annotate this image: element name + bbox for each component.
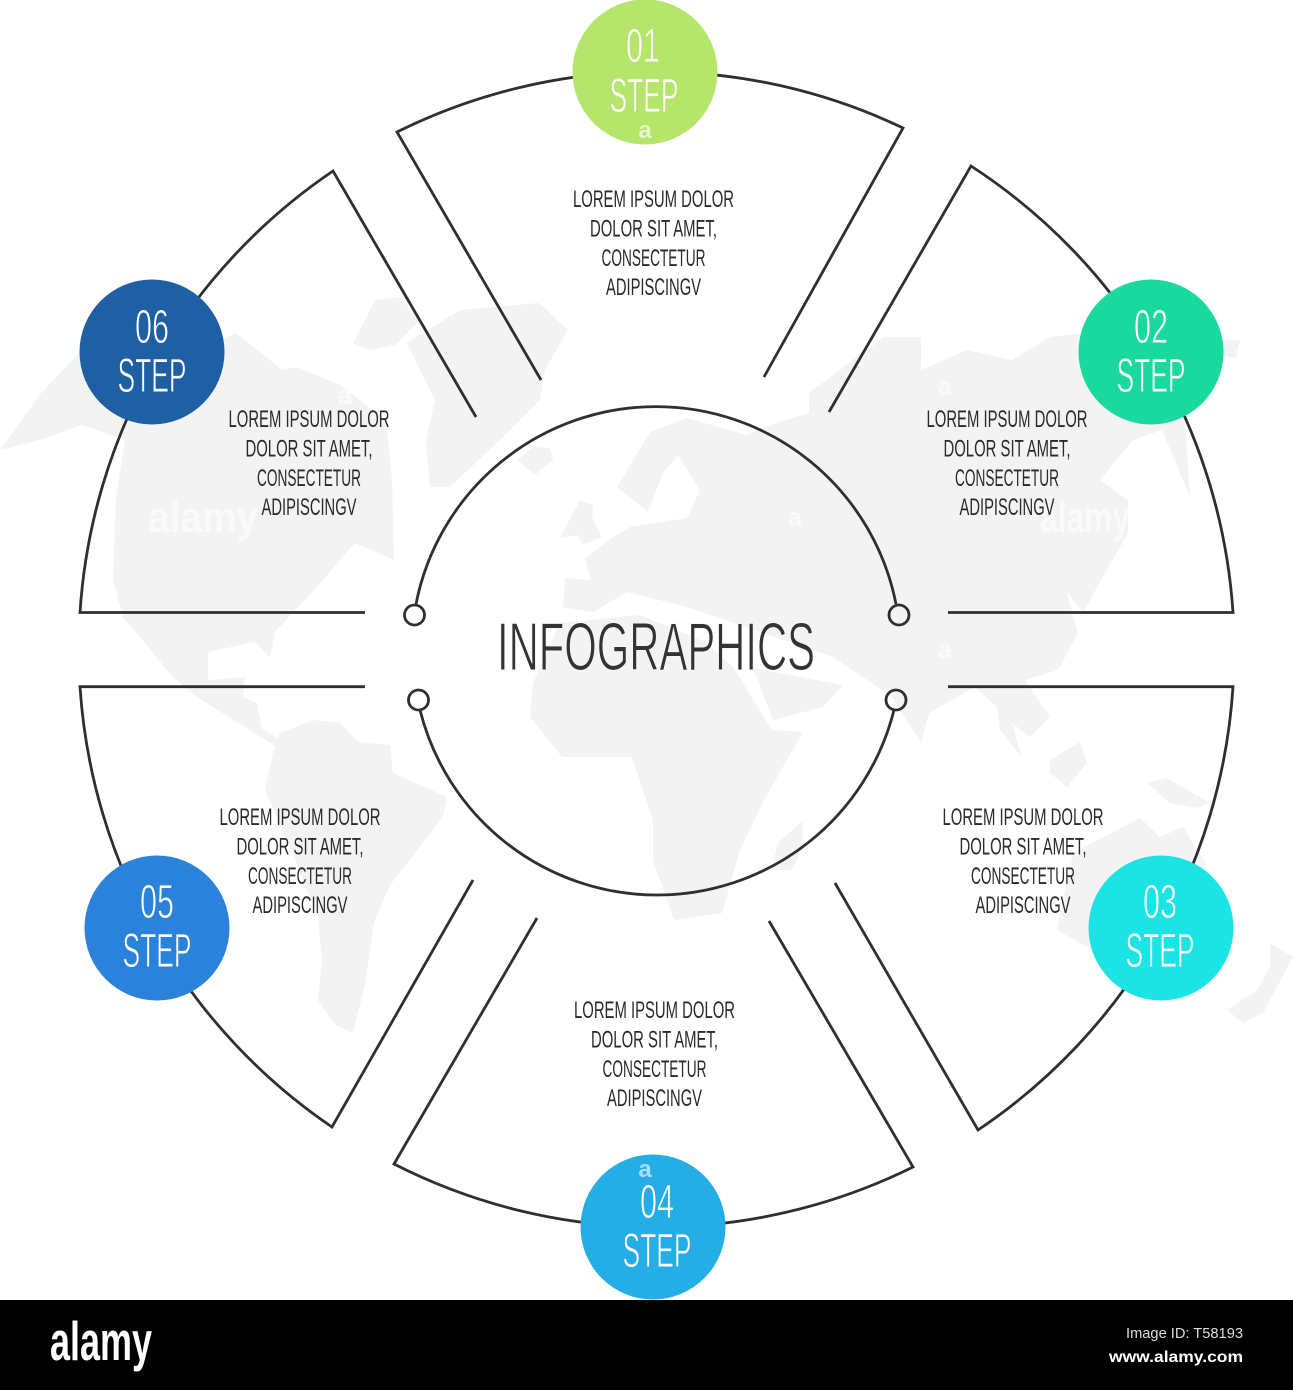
- text block: step 2: [926, 406, 1088, 521]
- badge: step 06: [80, 280, 224, 424]
- badge: step 01: 01: [626, 20, 660, 73]
- text block: step 4: LOREM IPSUM DOLOR: [574, 997, 735, 1024]
- watermark: left: alamy: [148, 493, 258, 542]
- footer bar: [0, 1300, 1293, 1390]
- text block: step 2: DOLOR SIT AMET,: [944, 436, 1070, 462]
- badge: step 01: [572, 0, 718, 144]
- map: australia: [1057, 818, 1210, 990]
- map: africa: [530, 615, 803, 920]
- text block: step 1: DOLOR SIT AMET,: [590, 216, 717, 242]
- panel: step 1 outline: [397, 72, 903, 380]
- text block: step 6: [228, 406, 390, 521]
- text block: step 3: LOREM IPSUM DOLOR: [942, 804, 1104, 831]
- text block: step 6: ADIPISCINGV: [262, 494, 356, 521]
- text block: step 1: CONSECTETUR: [602, 245, 706, 272]
- badge: step 04: STEP: [622, 1225, 692, 1278]
- map: greenland: [407, 303, 568, 487]
- panel: step 5 outline: [80, 687, 473, 1127]
- badge: step 06: 06: [135, 301, 169, 354]
- text block: step 6: CONSECTETUR: [257, 465, 361, 492]
- text block: step 1: ADIPISCINGV: [606, 274, 701, 301]
- text block: step 4: [574, 997, 735, 1112]
- badge: step 02: STEP: [1116, 350, 1186, 403]
- map: japan: [1050, 742, 1087, 787]
- panel: step 6 outline: [80, 171, 476, 612]
- map: madagascar: [771, 820, 803, 870]
- badge: step 05: STEP: [122, 925, 192, 978]
- map: arctic island: [353, 297, 420, 350]
- badge: step 04: [580, 1154, 726, 1300]
- text block: step 2: ADIPISCINGV: [960, 494, 1054, 521]
- text block: step 3: ADIPISCINGV: [976, 892, 1070, 919]
- text block: step 4: ADIPISCINGV: [607, 1085, 702, 1112]
- badge: step 03: 03: [1143, 876, 1177, 929]
- map: north america: [0, 333, 394, 747]
- badge: step 05: [84, 856, 230, 1000]
- badge: step 04: 04: [640, 1176, 674, 1229]
- map: british isles: [560, 500, 602, 545]
- map: arabia: [753, 668, 843, 720]
- badge: step 02: [1078, 280, 1224, 424]
- panel: step 4 outline: [394, 918, 913, 1227]
- watermark: glyph upper right: a: [938, 371, 953, 401]
- watermark: glyph right: a: [938, 634, 953, 664]
- map: south america: [265, 720, 447, 1033]
- watermark: right: alamy: [1040, 493, 1130, 542]
- badge: step 05: 05: [140, 876, 174, 929]
- footer image id: Image ID: T58193: [1126, 1325, 1243, 1342]
- text block: step 3: [942, 804, 1104, 919]
- watermark: glyph centre: a: [788, 502, 803, 532]
- map: indonesia: [1147, 778, 1210, 808]
- map: iceland: [517, 447, 553, 475]
- badge: step 06: STEP: [118, 350, 186, 403]
- text block: step 5: [220, 804, 380, 919]
- map: new zealand: [1227, 943, 1293, 1023]
- text block: step 5: CONSECTETUR: [248, 863, 352, 890]
- badge: step 02: 02: [1134, 301, 1168, 354]
- text block: step 3: CONSECTETUR: [971, 863, 1075, 890]
- text block: step 1: LOREM IPSUM DOLOR: [573, 186, 734, 213]
- text block: step 4: CONSECTETUR: [602, 1056, 706, 1083]
- footer logo: alamy: [50, 1310, 152, 1372]
- title: INFOGRAPHICS: [497, 609, 815, 685]
- text block: step 6: LOREM IPSUM DOLOR: [228, 406, 390, 433]
- text block: step 2: LOREM IPSUM DOLOR: [926, 406, 1088, 433]
- panel: step 2 outline: [829, 166, 1233, 612]
- text block: step 3: DOLOR SIT AMET,: [960, 834, 1086, 860]
- background world map: [0, 297, 1293, 1033]
- text block: step 1: [573, 186, 734, 301]
- badge: step 03: [1088, 856, 1234, 1000]
- centre ring: lower arc with end dots: [408, 690, 906, 895]
- watermark marks: [148, 371, 1130, 664]
- badge: step 04: a: [638, 1156, 652, 1183]
- text block: step 6: DOLOR SIT AMET,: [246, 436, 372, 462]
- panel: step 3 outline: [835, 687, 1233, 1130]
- badge: step 01: a: [638, 117, 652, 144]
- text block: step 5: DOLOR SIT AMET,: [236, 834, 364, 860]
- watermark: glyph upper left: a: [338, 380, 353, 410]
- centre ring: upper arc with end dots: [404, 407, 909, 625]
- footer url: www.alamy.com: [1108, 1349, 1243, 1366]
- map: eurasia: [563, 333, 1240, 758]
- text block: step 4: DOLOR SIT AMET,: [591, 1026, 718, 1054]
- text block: step 5: LOREM IPSUM DOLOR: [220, 804, 380, 831]
- badge: step 03: STEP: [1126, 925, 1194, 978]
- badge: step 01: STEP: [610, 70, 678, 123]
- text block: step 2: CONSECTETUR: [955, 465, 1059, 492]
- text block: step 5: ADIPISCINGV: [252, 892, 348, 919]
